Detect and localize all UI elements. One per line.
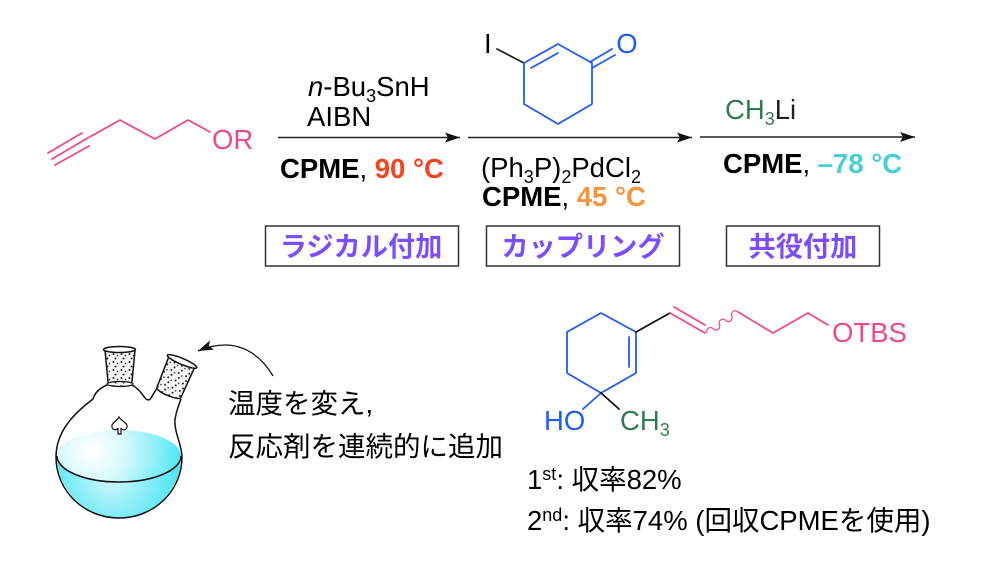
step 2 catalyst and conditions: P) bbox=[534, 152, 561, 183]
step 1 conditions: CPME, 90 °C bbox=[280, 153, 444, 184]
starting material: pentynyl ether: OR bbox=[212, 124, 253, 155]
step 3 reagent: 3 bbox=[765, 109, 775, 129]
stir bar spade bbox=[112, 417, 127, 434]
step 1 reagents above arrow: n-Bu bbox=[308, 71, 366, 102]
step 1 label box: ラジカル付加 bbox=[280, 231, 442, 262]
starting material: pentynyl ether bbox=[48, 120, 253, 165]
step 3 label box: 共役付加 bbox=[749, 231, 857, 262]
step 1 label box bbox=[266, 226, 458, 266]
step 2 catalyst and conditions: PdCl bbox=[571, 152, 631, 183]
step 2 catalyst and conditions: CPME, 45 °C bbox=[482, 181, 646, 212]
product structure: 3 bbox=[660, 420, 670, 440]
product structure: CH bbox=[620, 405, 660, 436]
step 3 label box bbox=[726, 226, 880, 266]
yield results: st bbox=[542, 464, 556, 484]
step 3 conditions: CPME, –78 °C bbox=[723, 148, 902, 179]
yield results: nd bbox=[542, 505, 562, 525]
centre neck stopper bbox=[104, 346, 136, 386]
procedure note: 反応剤を連続的に追加 bbox=[228, 431, 503, 462]
yield results: : 収率74% (回収CPMEを使用) bbox=[562, 505, 931, 536]
procedure note bbox=[228, 388, 503, 462]
step 2 catalyst and conditions: 2 bbox=[561, 167, 571, 187]
step 2 catalyst and conditions: 2 bbox=[631, 167, 641, 187]
step 1 reagents above arrow: AIBN bbox=[307, 101, 371, 132]
yield results: 1 bbox=[527, 464, 542, 495]
product structure: HO bbox=[544, 405, 585, 436]
step 3 reagent: CH bbox=[725, 94, 765, 125]
iodocyclohexenone reagent: I bbox=[484, 28, 492, 59]
step 2 label box: カップリング bbox=[501, 231, 665, 262]
arrow: step 3 bbox=[700, 136, 915, 138]
yield results bbox=[527, 464, 931, 536]
procedure note: 温度を変え, bbox=[228, 388, 373, 419]
arrow: step 1 bbox=[278, 136, 460, 138]
side neck stopper bbox=[153, 352, 198, 402]
iodocyclohexenone reagent bbox=[484, 28, 638, 124]
step 1 reagents above arrow: SnH bbox=[376, 71, 430, 102]
arrow: step 2 bbox=[468, 136, 692, 138]
yield results: 2 bbox=[527, 505, 542, 536]
step 3 reagent: Li bbox=[775, 94, 796, 125]
product structure: OTBS bbox=[832, 317, 907, 348]
iodocyclohexenone reagent: O bbox=[616, 28, 638, 59]
flask illustration bbox=[56, 346, 198, 518]
step 2 catalyst and conditions: (Ph bbox=[481, 152, 524, 183]
step 1 reagents above arrow: 3 bbox=[366, 86, 376, 106]
yield results: : 収率82% bbox=[556, 464, 682, 495]
liquid in flask bbox=[57, 430, 181, 518]
step 2 catalyst and conditions: 3 bbox=[524, 167, 534, 187]
step 1 reagents above arrow bbox=[307, 71, 430, 132]
product structure bbox=[544, 307, 907, 440]
step 2 catalyst and conditions bbox=[481, 152, 646, 212]
flask body outline bbox=[56, 385, 182, 518]
step 2 label box bbox=[486, 226, 680, 266]
curved arrow to flask neck bbox=[198, 345, 273, 376]
